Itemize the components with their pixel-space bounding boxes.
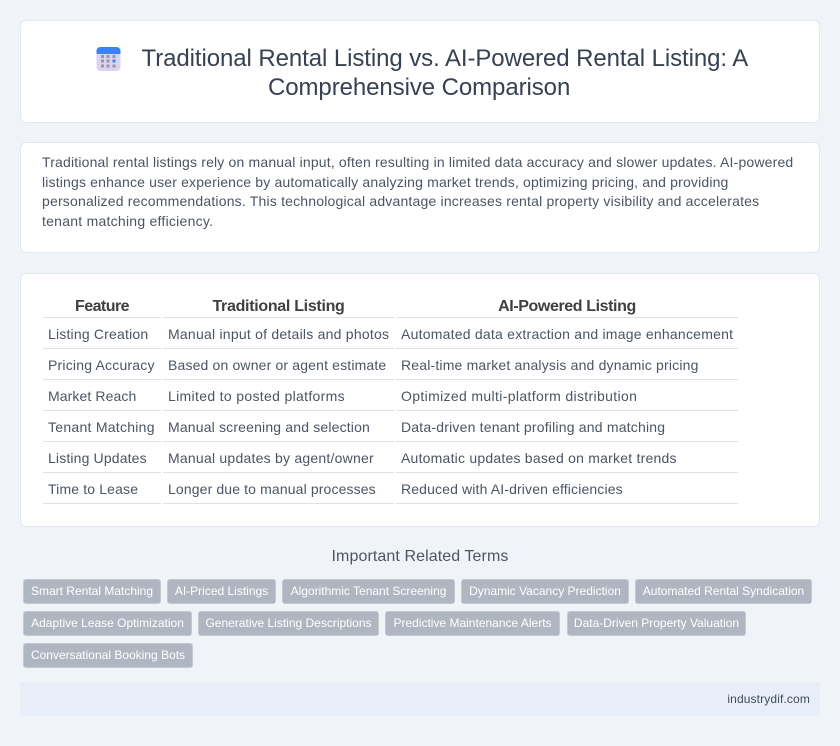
row: Listing Updates: Listing Updates: [48, 450, 147, 466]
tag: [567, 611, 746, 636]
intro paragraph: [42, 154, 793, 229]
row: Time to Lease: [48, 481, 623, 497]
intro paragraph: Traditional rental listings rely on manual input, often resulting in limited data accuracy and slower updates. AI-powered: [42, 154, 793, 170]
row: Market Reach: Limited to posted platforms: [168, 388, 345, 404]
row: Pricing Accuracy: Based on owner or agent estimate: [168, 357, 386, 373]
row: Time to Lease: Time to Lease: [48, 481, 138, 497]
tag: Data-Driven Property Valuation: [574, 616, 739, 630]
footer source: industrydif.com: [727, 692, 810, 706]
tag: [461, 579, 629, 604]
icon: calendar: [96, 47, 120, 71]
row: Time to Lease: Longer due to manual processes: [168, 481, 376, 497]
row: Pricing Accuracy: Real-time market analysis and dynamic pricing: [401, 357, 699, 373]
row: Tenant Matching: Data-driven tenant profiling and matching: [401, 419, 665, 435]
row: Listing Creation: Listing Creation: [48, 326, 148, 342]
row: Tenant Matching: [48, 419, 665, 435]
tag: [635, 579, 812, 604]
tag: Algorithmic Tenant Screening: [291, 584, 446, 598]
title: Traditional Rental Listing vs. AI-Powered Rental Listing: A: [142, 45, 748, 72]
intro paragraph: tenant matching efficiency.: [42, 212, 213, 228]
row: Listing Updates: Automatic updates based on market trends: [401, 450, 677, 466]
row: Listing Creation: [48, 326, 733, 342]
tag: [385, 611, 560, 636]
table header: AI-Powered Listing: AI-Powered Listing: [498, 298, 636, 315]
title: [142, 45, 748, 101]
tag: [282, 579, 455, 604]
row: Pricing Accuracy: Pricing Accuracy: [48, 357, 155, 373]
row: Listing Creation: Manual input of details and photos: [168, 326, 389, 342]
table header: Feature: Feature: [75, 298, 129, 315]
tag: [23, 643, 193, 668]
tag: [23, 611, 192, 636]
row: Market Reach: [48, 388, 637, 404]
row: Tenant Matching: Tenant Matching: [48, 419, 155, 435]
row: Listing Updates: Manual updates by agent/owner: [168, 450, 374, 466]
related terms tags: [23, 579, 812, 668]
tag: Dynamic Vacancy Prediction: [469, 584, 621, 598]
tag: [23, 579, 161, 604]
footer bar: [20, 682, 820, 716]
intro paragraph: personalized recommendations. This technological advantage increases rental property visibility and accelerates: [42, 193, 759, 209]
tag: AI-Priced Listings: [175, 584, 268, 598]
table header: Traditional Listing: Traditional Listing: [212, 298, 345, 315]
header panel: [20, 20, 820, 123]
tag: Conversational Booking Bots: [31, 648, 185, 662]
row: Listing Updates: [48, 450, 677, 466]
related terms heading: Important Related Terms: [332, 548, 508, 565]
row: Pricing Accuracy: [48, 357, 699, 373]
comparison table panel: [20, 273, 820, 527]
tag: Generative Listing Descriptions: [205, 616, 372, 630]
row: Tenant Matching: Manual screening and selection: [168, 419, 370, 435]
tag: [167, 579, 276, 604]
row: Listing Creation: Automated data extraction and image enhancement: [401, 326, 733, 342]
tag: [198, 611, 379, 636]
row: Time to Lease: Reduced with AI-driven efficiencies: [401, 481, 623, 497]
intro paragraph: listings enhance user experience by automatically analyzing market trends, optimizing pricing, and providing: [42, 174, 729, 190]
intro text panel: [20, 142, 820, 253]
tag: Automated Rental Syndication: [643, 584, 804, 598]
row: Market Reach: Market Reach: [48, 388, 136, 404]
tag: Predictive Maintenance Alerts: [393, 616, 552, 630]
tag: Smart Rental Matching: [31, 584, 153, 598]
title: Comprehensive Comparison: [268, 74, 570, 101]
tag: Adaptive Lease Optimization: [31, 616, 184, 630]
row: Market Reach: Optimized multi-platform distribution: [401, 388, 637, 404]
